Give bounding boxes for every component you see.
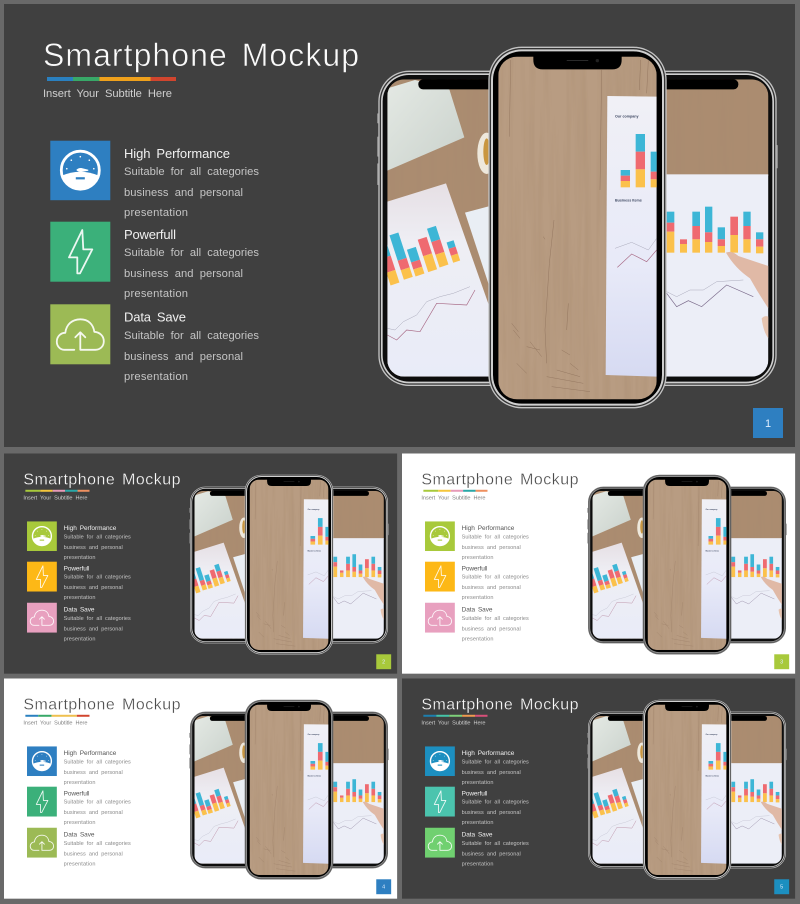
feature: High Performance: Suitable for all categories <box>64 534 131 540</box>
slide 5: small dark slide <box>402 678 795 899</box>
icon: bolt <box>50 222 110 282</box>
feature: High Performance <box>462 750 529 786</box>
feature: Powerfull: Suitable for all categories <box>124 247 259 259</box>
feature: Data Save: Suitable for all categories <box>64 616 131 622</box>
feature: High Performance <box>462 525 529 561</box>
feature: Powerfull: presentation <box>124 288 188 300</box>
title: Smartphone Mockup <box>23 471 181 488</box>
feature: Data Save <box>64 606 131 642</box>
slide 4: small white slide <box>4 678 397 899</box>
page number <box>753 408 783 438</box>
icon: bolt <box>27 787 57 817</box>
feature: High Performance: business and personal <box>462 770 521 776</box>
slide 2: small dark slide <box>4 454 397 674</box>
feature: Data Save: Data Save <box>64 831 95 838</box>
page number: 3 <box>780 660 783 666</box>
feature: High Performance: Suitable for all categories <box>124 166 259 178</box>
subtitle: Insert Your Subtitle Here <box>23 496 87 502</box>
feature: Powerfull: Powerfull <box>64 565 89 572</box>
feature: High Performance <box>64 525 131 561</box>
feature: Powerfull: presentation <box>462 595 493 601</box>
feature: High Performance: Suitable for all categories <box>462 534 529 540</box>
feature: Powerfull <box>64 790 131 826</box>
icon: cloud upload <box>50 304 110 364</box>
feature: Data Save <box>462 831 529 867</box>
feature: Powerfull: business and personal <box>64 585 123 591</box>
feature: Data Save: business and personal <box>462 851 521 857</box>
subtitle: Insert Your Subtitle Here <box>421 496 485 502</box>
feature: High Performance <box>124 146 259 219</box>
feature: High Performance: business and personal <box>64 770 123 776</box>
feature: Powerfull <box>64 565 131 601</box>
feature: Data Save: presentation <box>462 636 493 642</box>
icon: cloud upload <box>425 603 455 633</box>
three phones mockup <box>189 475 389 654</box>
title: Smartphone Mockup <box>421 696 579 713</box>
feature: High Performance: presentation <box>462 555 493 561</box>
feature: Data Save: Data Save <box>124 310 186 324</box>
feature: High Performance: High Performance <box>124 146 230 161</box>
icon: bolt <box>425 562 455 592</box>
feature: Powerfull: presentation <box>64 595 95 601</box>
slide 3: small white slide <box>402 454 795 674</box>
feature: Data Save: Data Save <box>64 606 95 613</box>
feature: High Performance: presentation <box>462 780 493 786</box>
three phones mockup <box>189 700 389 879</box>
feature: Data Save: business and personal <box>462 626 521 632</box>
feature: Powerfull: Suitable for all categories <box>64 575 131 581</box>
feature: High Performance: business and personal <box>64 545 123 551</box>
icon: cloud upload <box>27 603 57 633</box>
icon: bolt <box>425 787 455 817</box>
feature: Data Save: presentation <box>64 636 95 642</box>
feature: Powerfull: Powerfull <box>64 790 89 797</box>
feature: High Performance: High Performance <box>462 525 515 532</box>
feature: Data Save: business and personal <box>64 851 123 857</box>
feature: Powerfull <box>124 227 259 300</box>
feature: High Performance: High Performance <box>64 525 117 532</box>
feature: Powerfull: Powerfull <box>462 565 487 572</box>
feature: Powerfull: business and personal <box>462 810 521 816</box>
feature: Powerfull: Suitable for all categories <box>462 800 529 806</box>
feature: Data Save: presentation <box>124 371 188 383</box>
feature: Data Save: Suitable for all categories <box>124 330 259 342</box>
icon: cloud upload <box>425 828 455 858</box>
icon: gauge <box>425 746 455 776</box>
feature: High Performance <box>64 750 131 786</box>
feature: Data Save: Data Save <box>462 606 493 613</box>
feature: Data Save: Suitable for all categories <box>64 841 131 847</box>
page number <box>376 654 391 669</box>
feature: Data Save: Suitable for all categories <box>462 841 529 847</box>
rainbow title underline <box>47 77 176 81</box>
feature: Powerfull: Powerfull <box>124 227 176 242</box>
page number: 5 <box>780 885 783 891</box>
feature: High Performance: Suitable for all categories <box>64 759 131 765</box>
feature: High Performance: Suitable for all categories <box>462 759 529 765</box>
page number: 2 <box>382 660 385 666</box>
feature: High Performance: High Performance <box>462 750 515 757</box>
title: Smartphone Mockup <box>421 471 579 488</box>
rainbow title underline <box>423 490 487 492</box>
feature: Powerfull <box>462 790 529 826</box>
subtitle: Insert Your Subtitle Here <box>421 721 485 727</box>
page number: 4 <box>382 885 385 891</box>
feature: Data Save: Suitable for all categories <box>462 616 529 622</box>
icon: gauge <box>27 521 57 551</box>
feature: High Performance: presentation <box>64 555 95 561</box>
feature: High Performance: business and personal <box>462 545 521 551</box>
feature: High Performance: presentation <box>64 780 95 786</box>
feature: Powerfull <box>462 565 529 601</box>
three phones mockup <box>587 700 787 879</box>
feature: High Performance: business and personal <box>124 187 243 199</box>
three phones mockup <box>587 475 787 654</box>
feature: Data Save: presentation <box>462 861 493 867</box>
subtitle: Insert Your Subtitle Here <box>23 721 87 727</box>
feature: Powerfull: business and personal <box>64 810 123 816</box>
rainbow title underline <box>25 490 89 492</box>
three phones mockup <box>376 47 778 408</box>
feature: Data Save: Data Save <box>462 831 493 838</box>
subtitle: Insert Your Subtitle Here <box>43 88 172 100</box>
page number: 1 <box>765 418 771 430</box>
feature: Data Save: presentation <box>64 861 95 867</box>
rainbow title underline <box>423 715 487 717</box>
page number <box>774 654 789 669</box>
rainbow title underline <box>25 715 89 717</box>
feature: Powerfull: presentation <box>462 820 493 826</box>
feature: Powerfull: Powerfull <box>462 790 487 797</box>
feature: Powerfull: presentation <box>64 820 95 826</box>
feature: High Performance: High Performance <box>64 750 117 757</box>
icon: cloud upload <box>27 828 57 858</box>
feature: Powerfull: business and personal <box>462 585 521 591</box>
feature: Powerfull: business and personal <box>124 268 243 280</box>
page number <box>774 879 789 894</box>
icon: bolt <box>27 562 57 592</box>
feature: Data Save: business and personal <box>64 626 123 632</box>
page number <box>376 879 391 894</box>
title: Smartphone Mockup <box>43 37 359 73</box>
feature: Data Save <box>462 606 529 642</box>
feature: Data Save <box>124 310 259 383</box>
title: Smartphone Mockup <box>23 696 181 713</box>
slide 1: large dark slide <box>4 4 795 447</box>
feature: Data Save <box>64 831 131 867</box>
feature: Powerfull: Suitable for all categories <box>462 575 529 581</box>
feature: High Performance: presentation <box>124 207 188 219</box>
icon: gauge <box>27 746 57 776</box>
icon: gauge <box>50 141 110 200</box>
icon: gauge <box>425 521 455 551</box>
feature: Powerfull: Suitable for all categories <box>64 800 131 806</box>
feature: Data Save: business and personal <box>124 351 243 363</box>
